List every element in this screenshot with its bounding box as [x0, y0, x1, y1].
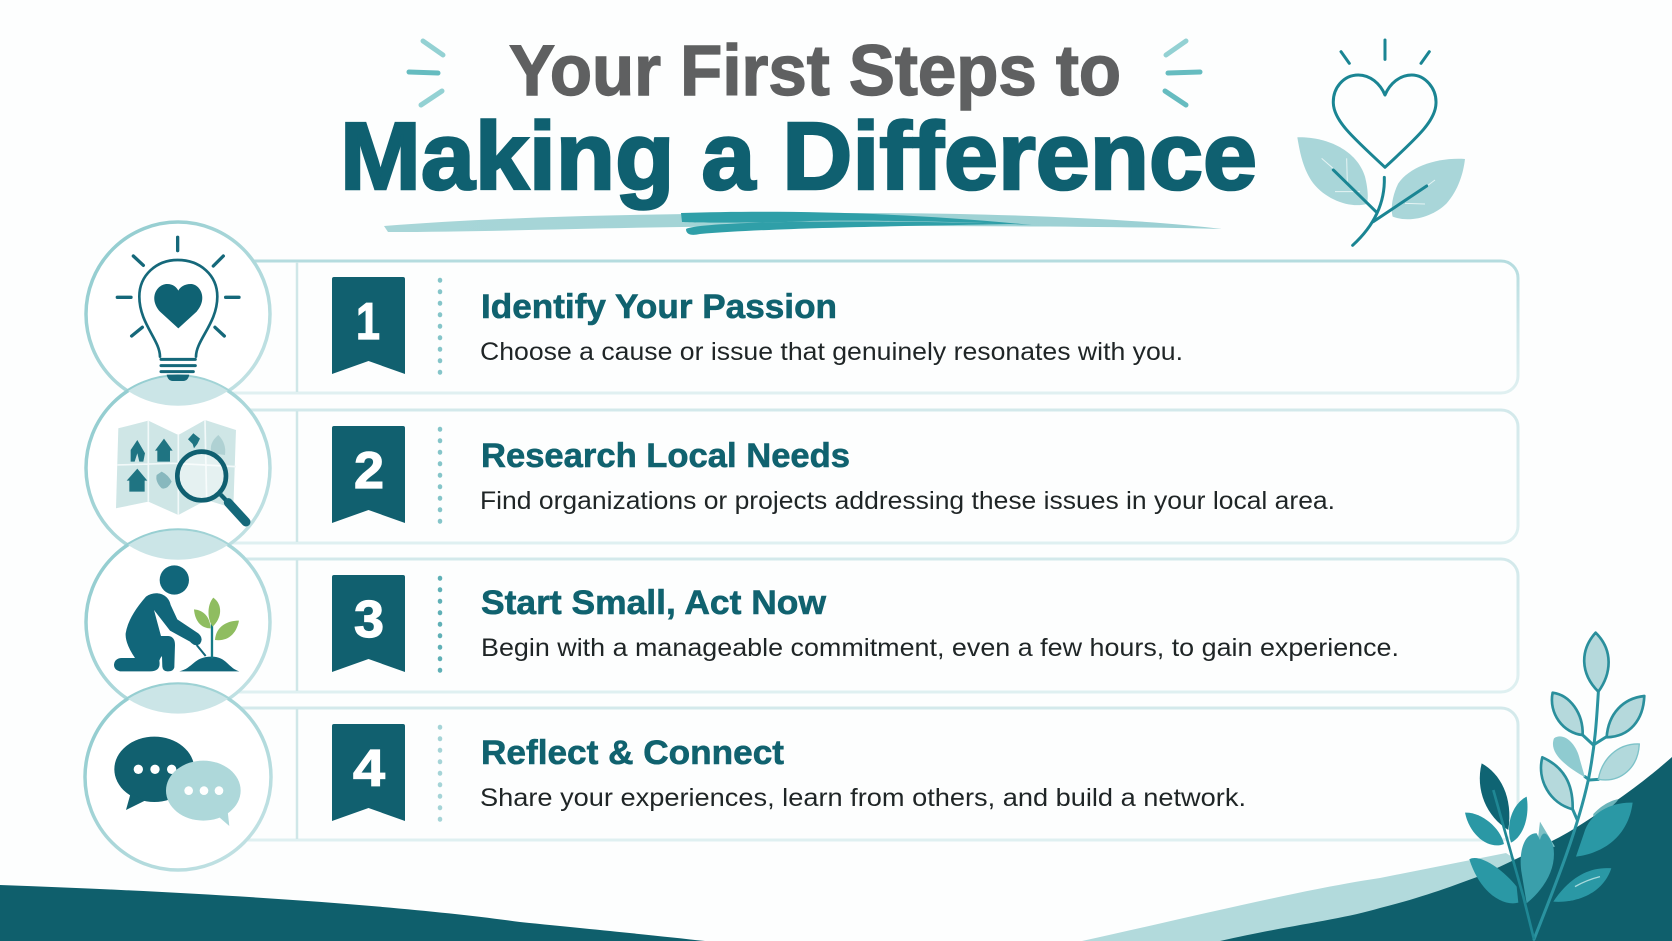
panel: step 4 [200, 708, 1518, 840]
number ribbon 1: 1 [356, 293, 380, 351]
bottom wave right light [1082, 853, 1520, 941]
card outline [200, 559, 1518, 692]
step 1 text: Choose a cause or issue that genuinely resonates with you. [480, 338, 1183, 366]
title line 1: Your First Steps to [509, 32, 1121, 111]
number ribbon 2 [332, 426, 405, 523]
step 4 text [480, 734, 1246, 812]
step 4 text: Reflect & Connect [481, 734, 784, 772]
dotted separator [438, 578, 442, 672]
number ribbon 3: 3 [354, 591, 384, 649]
divider [296, 262, 298, 392]
bottom wave right dark [1220, 757, 1672, 941]
title line 2: Making a Difference [340, 103, 1257, 210]
dotted separator [438, 280, 442, 374]
dotted separator [438, 429, 442, 523]
icon rings with overlaps [85, 222, 271, 870]
panel: step 2 [200, 410, 1518, 543]
title sparks right [1165, 41, 1200, 105]
step 3 text: Begin with a manageable commitment, even a few hours, to gain experience. [481, 634, 1399, 662]
icon 2: map with magnifier [116, 420, 246, 522]
step 4 text: Share your experiences, learn from others, and build a network. [480, 784, 1246, 812]
number ribbon 2: 2 [354, 442, 384, 500]
panel: step 3 [200, 559, 1518, 692]
panel: step 1 [200, 261, 1518, 393]
step 2 text: Research Local Needs [481, 437, 850, 475]
card outline [200, 261, 1518, 393]
step 2 text: Find organizations or projects addressing these issues in your local area. [480, 487, 1335, 515]
bottom wave left [0, 885, 705, 941]
number ribbon 3 [332, 575, 405, 672]
number ribbon 1 [332, 277, 405, 374]
title [340, 32, 1257, 210]
number ribbon 4 [332, 724, 405, 821]
step 1 text: Identify Your Passion [481, 288, 837, 326]
divider [296, 560, 298, 691]
icon 1: lightbulb with heart [117, 237, 239, 381]
divider [296, 411, 298, 542]
card outline [200, 708, 1518, 840]
icon: heart with leaves [1297, 40, 1465, 245]
icon 3: person planting seedling [114, 565, 239, 671]
step 3 text [481, 584, 1399, 662]
step 1 text [480, 288, 1183, 366]
dotted separator [438, 727, 442, 821]
card outline [200, 410, 1518, 543]
number ribbon 4: 4 [353, 740, 385, 798]
title sparks left [409, 41, 443, 105]
icon: plant sprig [1465, 633, 1644, 939]
divider [296, 709, 298, 839]
step 3 text: Start Small, Act Now [481, 584, 827, 622]
step 2 text [480, 437, 1335, 515]
icon 4: speech bubbles [114, 737, 241, 826]
brush underline [384, 212, 1222, 235]
